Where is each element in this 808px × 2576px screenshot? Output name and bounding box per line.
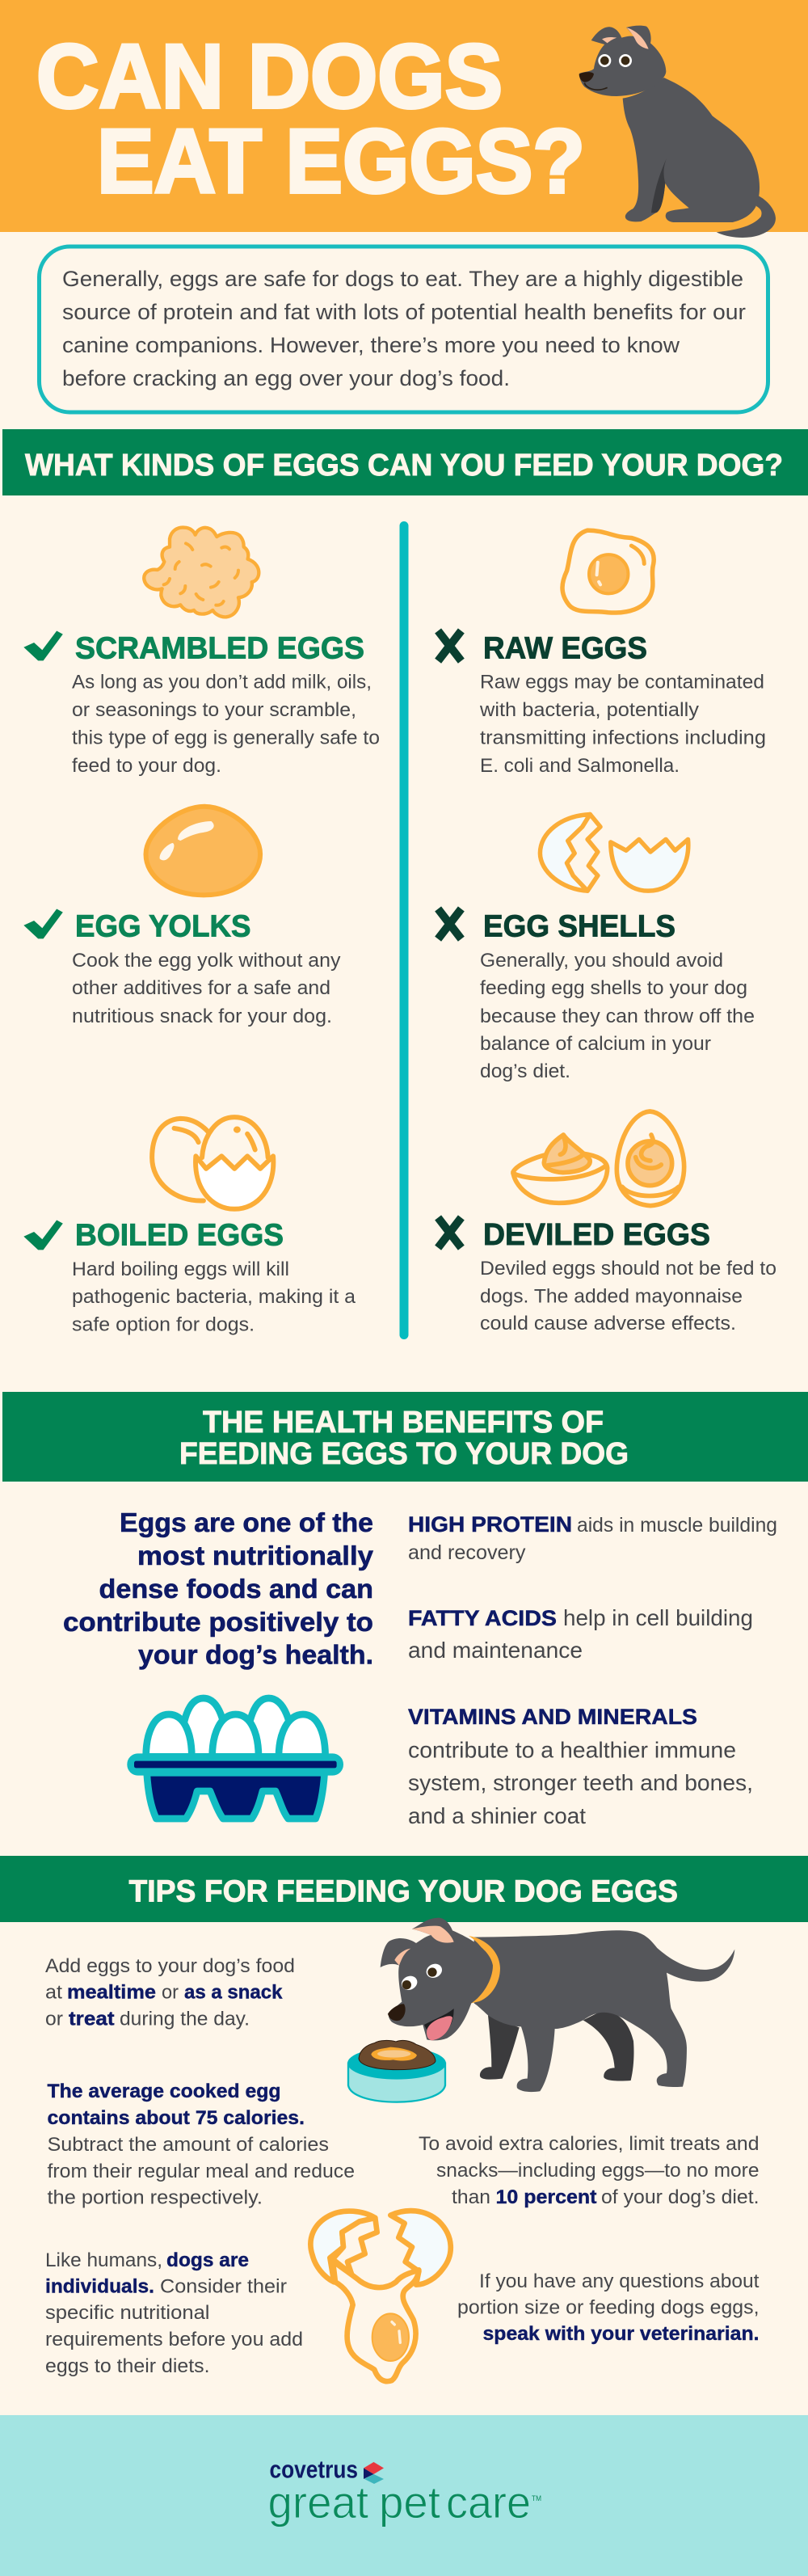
tip: veterinarian: If you have any questions about <box>479 2270 760 2292</box>
text: egg yolks: nutritious snack for your dog. <box>72 1006 332 1027</box>
tip: individuals: Consider their <box>160 2276 287 2297</box>
tip: add eggs: at <box>45 1982 62 2003</box>
text: egg shells: dog’s diet. <box>480 1060 570 1082</box>
tip: calories: the portion respectively. <box>47 2187 263 2208</box>
text: egg shells: balance of calcium in your <box>480 1033 711 1055</box>
icon: check mark <box>23 909 63 938</box>
icon: scrambled egg <box>144 528 259 617</box>
tip: ten percent: To avoid extra calories, limit treats and <box>419 2133 760 2155</box>
logo: great pet care: care <box>446 2477 531 2528</box>
panel: boiled eggs <box>23 1117 356 1335</box>
panel: intro box <box>39 247 768 412</box>
icon: check mark <box>23 630 63 660</box>
heading band: tips <box>0 1856 808 1922</box>
benefit: vitamins and minerals <box>408 1705 753 1828</box>
logo: great pet care: great <box>268 2477 368 2528</box>
divider line <box>399 521 409 1339</box>
text: scrambled eggs: or seasonings to your scramble, <box>72 699 356 721</box>
icon: egg carton <box>127 1698 343 1819</box>
panel: footer <box>0 2415 808 2576</box>
tip: ten percent: of your dog’s diet. <box>601 2186 760 2208</box>
illustration: dog eating from bowl <box>347 1918 734 2102</box>
heading: raw eggs: RAW EGGS <box>483 632 647 666</box>
panel: orange header <box>0 0 808 238</box>
heading: egg shells: EGG SHELLS <box>483 910 675 944</box>
heading: scrambled eggs: SCRAMBLED EGGS <box>75 632 364 666</box>
tip: add eggs: or <box>162 1982 179 2003</box>
tip: add eggs: as a snack <box>184 1982 283 2003</box>
text: egg yolks: Cook the egg yolk without any <box>72 950 341 972</box>
tip: calories: from their regular meal and reduce <box>47 2161 355 2182</box>
tip: individuals: Like humans, <box>45 2249 162 2271</box>
far legs <box>480 2009 634 2081</box>
tip: veterinarian: speak with your veterinarian. <box>483 2323 760 2345</box>
tip: calories: The average cooked egg <box>47 2081 281 2102</box>
panel: egg yolks <box>23 807 341 1027</box>
benefit: high protein: aids in muscle building <box>577 1515 777 1537</box>
text: egg shells: because they can throw off the <box>480 1006 755 1027</box>
tip: ten percent: 10 percent <box>496 2186 596 2208</box>
text: raw eggs: Raw eggs may be contaminated <box>480 671 764 694</box>
benefit: fatty acids: and maintenance <box>408 1638 583 1663</box>
tip: individuals <box>45 2249 303 2377</box>
heading band: what kinds of eggs <box>2 429 808 495</box>
icon: egg shells <box>540 814 688 891</box>
title <box>36 26 585 212</box>
benefit: high protein: and recovery <box>408 1542 526 1564</box>
intro text: canine companions. However, there’s more you need to know <box>62 333 680 357</box>
icon: egg yolk <box>145 807 260 895</box>
heading: boiled eggs: BOILED EGGS <box>75 1219 284 1253</box>
tip: individuals: eggs to their diets. <box>45 2355 210 2377</box>
icon: sitting dog <box>579 26 776 238</box>
panel: egg shells <box>438 814 755 1082</box>
benefit: high protein <box>408 1512 777 1564</box>
icon: cracked egg <box>310 2211 451 2381</box>
benefit: fatty acids <box>408 1605 753 1663</box>
tip: individuals: specific nutritional <box>45 2302 210 2324</box>
panel: raw eggs <box>438 530 766 777</box>
text: scrambled eggs: this type of egg is generally safe to <box>72 727 380 748</box>
intro text: Generally, eggs are safe for dogs to eat. They are a highly digestible <box>62 267 743 291</box>
callout: nutritionally dense: contribute positively to <box>63 1607 373 1637</box>
text: deviled eggs <box>480 1258 776 1334</box>
tip: calories: Subtract the amount of calories <box>47 2134 329 2156</box>
tip: add eggs: mealtime <box>67 1982 156 2003</box>
text: deviled eggs: dogs. The added mayonnaise <box>480 1285 743 1308</box>
tip: veterinarian: portion size or feeding dogs eggs, <box>457 2297 760 2318</box>
text: scrambled eggs: As long as you don’t add milk, oils, <box>72 671 372 694</box>
icon: check mark <box>23 1220 63 1250</box>
tip: calories: contains about 75 calories. <box>47 2107 305 2129</box>
callout: nutritionally dense: dense foods and can <box>99 1574 373 1604</box>
logo: great pet care <box>268 2477 541 2528</box>
tip: add eggs <box>45 1955 295 2030</box>
heading band: health benefits: THE HEALTH BENEFITS OF <box>203 1406 604 1440</box>
text: egg shells <box>480 950 755 1082</box>
text: egg yolks <box>72 950 341 1027</box>
text: deviled eggs: could cause adverse effects. <box>480 1313 736 1334</box>
tip: add eggs: treat <box>69 2008 115 2030</box>
text: boiled eggs <box>72 1258 356 1335</box>
panel: scrambled eggs <box>23 528 380 777</box>
text: egg yolks: other additives for a safe and <box>72 977 330 999</box>
heading band: health benefits: FEEDING EGGS TO YOUR DOG <box>179 1437 629 1471</box>
intro text: source of protein and fat with lots of potential health benefits for our <box>62 300 746 324</box>
heading: egg yolks: EGG YOLKS <box>75 910 250 944</box>
benefit: high protein: HIGH PROTEIN <box>408 1512 572 1537</box>
benefit: fatty acids: help in cell building <box>563 1605 753 1630</box>
tip: calories <box>47 2081 355 2208</box>
benefit: vitamins and minerals: VITAMINS AND MINERALS <box>408 1705 697 1729</box>
text: boiled eggs: pathogenic bacteria, making it a <box>72 1286 356 1308</box>
callout: nutritionally dense: your dog’s health. <box>138 1639 373 1670</box>
heading band: what kinds of eggs: WHAT KINDS OF EGGS CAN YOU FEED YOUR DOG? <box>25 449 783 483</box>
icon: boiled eggs <box>152 1117 273 1209</box>
heading band: tips: TIPS FOR FEEDING YOUR DOG EGGS <box>129 1875 678 1909</box>
text: boiled eggs: Hard boiling eggs will kill <box>72 1258 289 1280</box>
callout: nutritionally dense: most nutritionally <box>137 1541 374 1570</box>
tip: ten percent: than <box>452 2186 490 2208</box>
icon: x mark <box>438 1217 461 1248</box>
icon: x mark <box>438 909 461 939</box>
text: raw eggs: with bacteria, potentially <box>479 699 700 721</box>
dog body <box>474 1930 734 2092</box>
text: raw eggs: transmitting infections including <box>480 727 766 748</box>
logo: great pet care: TM <box>532 2494 541 2502</box>
benefit: fatty acids: FATTY ACIDS <box>408 1606 557 1630</box>
tip: add eggs: or <box>45 2008 63 2030</box>
dog head <box>381 1918 493 2040</box>
tip: individuals: dogs are <box>166 2249 249 2271</box>
text: scrambled eggs <box>72 671 380 777</box>
icon: x mark <box>438 630 461 661</box>
callout: nutritionally dense <box>63 1507 374 1670</box>
text: egg shells: feeding egg shells to your dog <box>480 977 747 999</box>
intro text <box>62 267 746 390</box>
text: raw eggs: E. coli and Salmonella. <box>480 755 680 777</box>
tip: individuals: requirements before you add <box>45 2329 303 2350</box>
intro text: before cracking an egg over your dog’s food. <box>62 366 510 390</box>
tip: individuals: individuals. <box>45 2276 154 2297</box>
callout: nutritionally dense: Eggs are one of the <box>120 1507 373 1537</box>
tip: add eggs: Add eggs to your dog’s food <box>45 1955 295 1977</box>
text: deviled eggs: Deviled eggs should not be fed to <box>480 1258 776 1280</box>
tip: add eggs: during the day. <box>120 2008 250 2030</box>
dog collar <box>468 1936 500 2004</box>
text: egg shells: Generally, you should avoid <box>480 950 723 972</box>
benefit: vitamins and minerals: contribute to a healthier immune <box>408 1738 736 1762</box>
heading: deviled eggs: DEVILED EGGS <box>483 1218 710 1252</box>
benefit: vitamins and minerals: and a shinier coat <box>408 1803 586 1828</box>
logo: covetrus: covetrus <box>270 2456 358 2483</box>
logo: great pet care: pet <box>379 2477 440 2528</box>
food bowl <box>347 2040 446 2102</box>
title: CAN DOGS <box>36 26 503 127</box>
text: boiled eggs: safe option for dogs. <box>72 1314 255 1335</box>
tip: veterinarian <box>457 2270 760 2345</box>
heading band: health benefits <box>2 1392 808 1482</box>
icon: raw egg <box>562 530 654 613</box>
tip: ten percent: snacks—including eggs—to no more <box>436 2160 760 2182</box>
icon: deviled eggs <box>513 1111 684 1206</box>
benefit: vitamins and minerals: system, stronger teeth and bones, <box>408 1770 753 1795</box>
title: EAT EGGS? <box>97 111 585 212</box>
text: scrambled eggs: feed to your dog. <box>72 755 221 777</box>
tip: ten percent <box>419 2133 760 2208</box>
panel: deviled eggs <box>438 1111 776 1334</box>
text: raw eggs <box>479 671 766 777</box>
